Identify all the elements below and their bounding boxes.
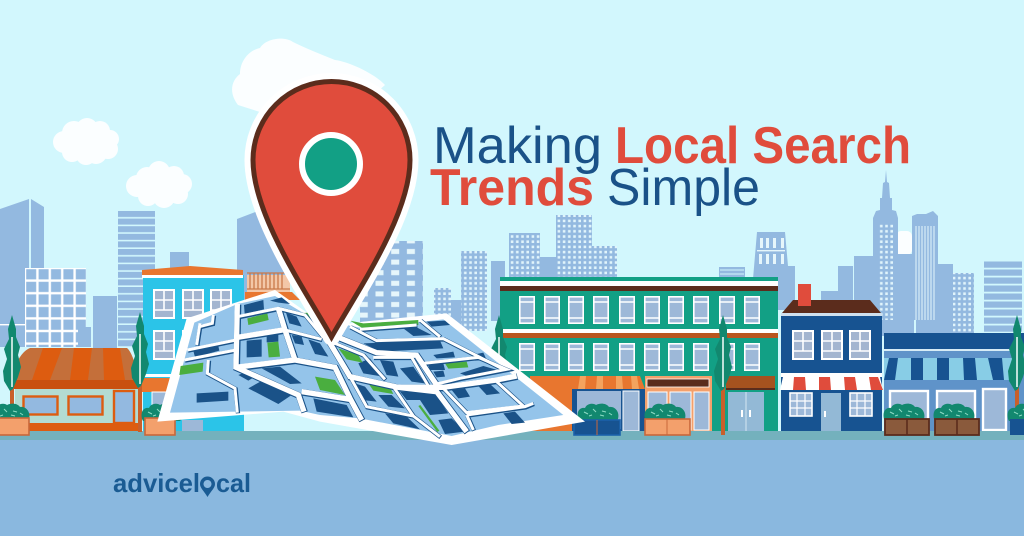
building: cyan apartment bbox=[142, 266, 244, 431]
map parks bbox=[179, 313, 468, 432]
title: Trends bbox=[430, 159, 594, 217]
title bbox=[430, 117, 911, 217]
title: Making bbox=[433, 117, 602, 175]
sidewalk bbox=[0, 431, 1024, 440]
logo pin bbox=[200, 477, 215, 497]
cloud: large behind pin bbox=[232, 39, 385, 125]
map road edges bbox=[185, 305, 534, 437]
map sheet bbox=[157, 290, 585, 445]
cloud: left lower bbox=[126, 161, 192, 208]
building: navy house bbox=[780, 284, 883, 431]
cloud: left upper bbox=[53, 118, 119, 165]
skyline: left bbox=[0, 199, 290, 351]
title: Simple bbox=[607, 159, 760, 217]
map land base bbox=[170, 296, 563, 436]
balcony rail and orange roof bbox=[245, 273, 300, 300]
map roads bbox=[184, 304, 533, 437]
cloud: behind skyscraper bbox=[896, 231, 912, 255]
building: blue shop bbox=[884, 333, 1024, 431]
logo: advicelocal bbox=[113, 468, 251, 498]
street trees bbox=[3, 312, 1024, 435]
map buildings bbox=[193, 297, 525, 434]
logo: advicelocal: advicel bbox=[113, 468, 200, 498]
map bbox=[157, 290, 585, 445]
ground bbox=[0, 440, 1024, 536]
building: orange shop bbox=[12, 348, 142, 431]
skyline: centre bbox=[360, 215, 795, 331]
pin centre dot bbox=[302, 135, 360, 193]
planters bbox=[0, 404, 1024, 435]
logo: advicelocal: cal bbox=[216, 468, 251, 498]
skyline: right with skyscraper bbox=[821, 170, 1022, 336]
location pin bbox=[253, 82, 410, 337]
title: Local Search bbox=[615, 117, 911, 175]
building: green block bbox=[500, 277, 778, 431]
